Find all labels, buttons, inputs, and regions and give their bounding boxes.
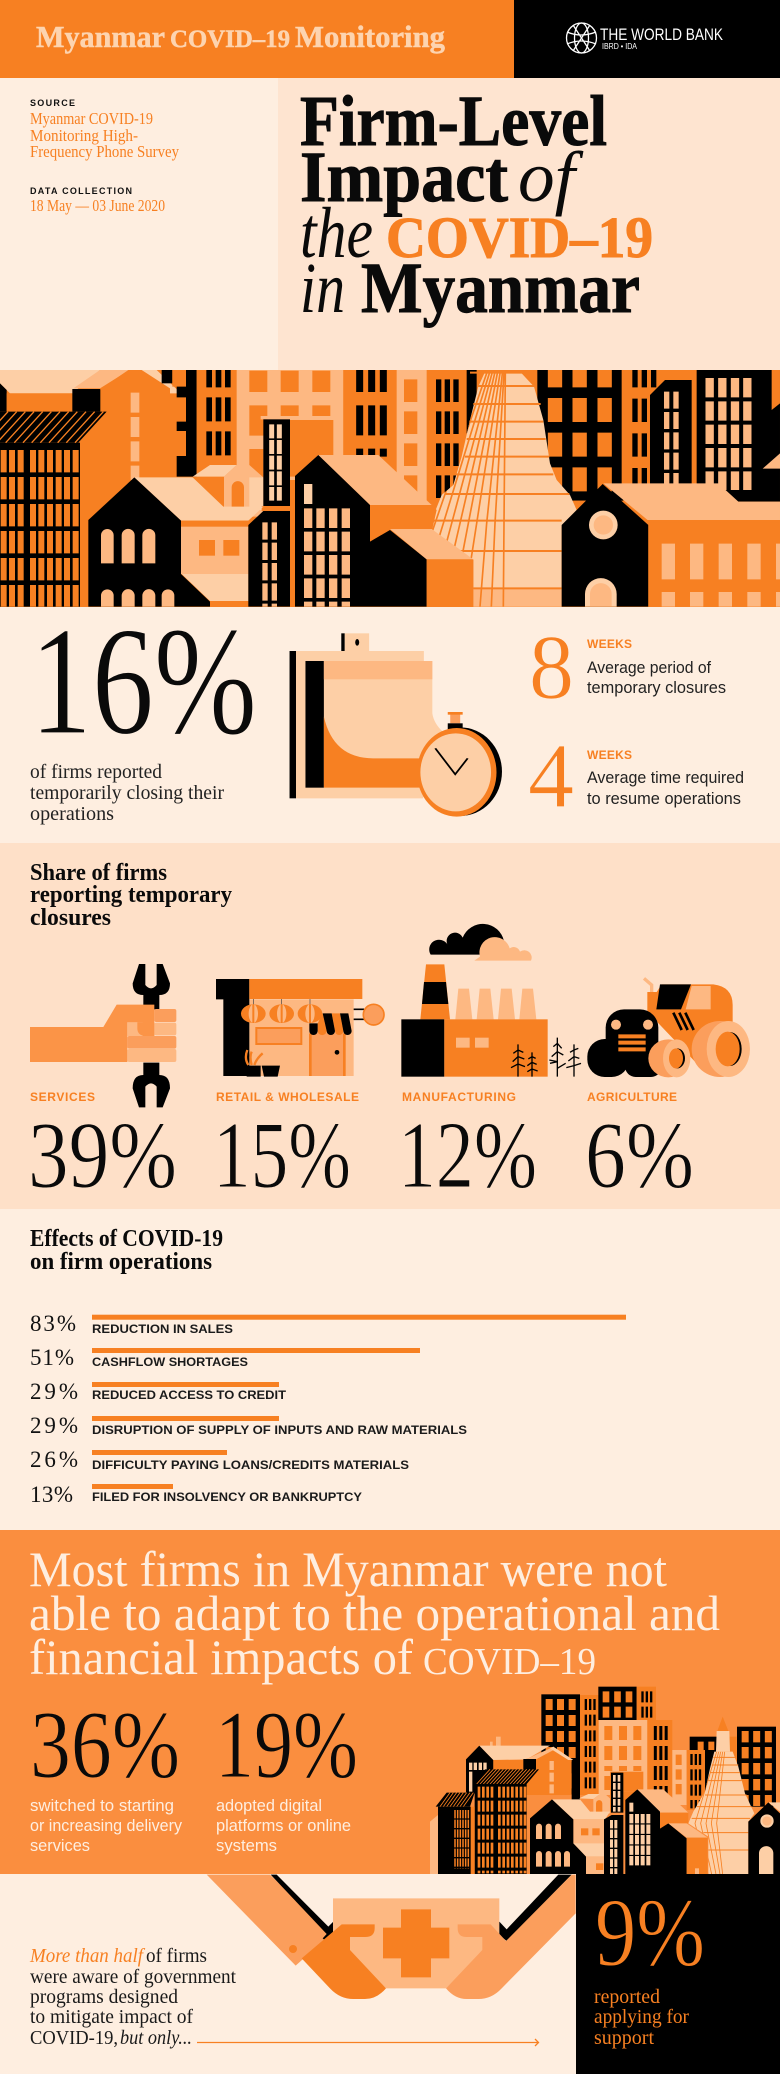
source block: Myanmar COVID-19 [30,109,153,128]
illustration: hands holding aid package [207,1875,576,1999]
source block: SOURCE [30,98,75,108]
caption: reported applying: applying for [594,2006,689,2028]
icon: factory [401,924,581,1077]
data collection block: 18 May — 03 June 2020 [30,196,165,215]
main title [300,81,653,328]
illustration: city skyline [0,362,780,607]
heading: effects [30,1225,223,1275]
stat: 8 weeks [529,616,726,718]
bar chart: effects: 13% [30,1482,73,1507]
bar chart: effects: CASHFLOW SHORTAGES [92,1355,248,1369]
bar chart: effects: REDUCED ACCESS TO CREDIT [92,1388,287,1402]
stat: 8 weeks: temporary closures [587,678,726,697]
stat: 16%: 16% [30,595,257,767]
main title: COVID–19 [386,205,653,270]
stat: 36% delivery [30,1691,182,1855]
text: more than half: to mitigate impact of [30,2006,193,2028]
heading: effects: Effects of COVID-19 [30,1225,223,1252]
World Bank wordmark [600,25,724,51]
bar chart: effects: 51% [30,1345,74,1370]
banner title: Myanmar [36,19,165,54]
sector labels: MANUFACTURING [402,1090,516,1104]
text: more than half: More than half [29,1945,145,1967]
caption: reported applying [594,1986,689,2049]
heading: share of firms: Share of firms [30,859,167,886]
stat: 36% delivery: or increasing delivery [30,1816,182,1835]
text: more than half: COVID-19, [30,2027,118,2049]
bar chart: effects: DIFFICULTY PAYING LOANS/CREDITS MATERIALS [92,1458,409,1472]
caption: firms closing [30,762,224,825]
World Bank wordmark: IBRD • IDA [602,41,637,51]
panel: awareness of government programs [0,1874,576,2074]
source block [30,98,179,161]
stat: 8 weeks: 8 [529,616,574,718]
intro panel [0,78,780,370]
panel: share of firms by sector [0,843,780,1209]
main title: of [518,137,584,217]
stat: 19% digital: platforms or online [216,1816,351,1835]
text: more than half: were aware of government [30,1966,236,1988]
arrow [197,2039,538,2046]
banner title: COVID–19 [170,26,290,53]
sector labels: SERVICES [30,1090,95,1104]
stat: 4 weeks: WEEKS [587,748,632,762]
source block: Frequency Phone Survey [30,142,179,161]
bar chart: effects: 83% [30,1311,76,1336]
icon: hand with wrench [30,964,176,1107]
bar chart: effects: 29% [30,1413,78,1438]
sector percentages: 39% [28,1102,177,1208]
heading: most firms: able to adapt to the operational and [29,1585,720,1641]
stat: 8 weeks: Average period of [587,658,711,677]
caption: reported applying: reported [594,1986,660,2008]
stat: 8 weeks: WEEKS [587,637,632,651]
heading: most firms: financial impacts of [29,1629,413,1685]
bar chart: effects: FILED FOR INSOLVENCY OR BANKRUPTCY [92,1490,362,1504]
text: more than half: but only... [120,2027,192,2049]
stat: 4 weeks: Average time required [587,768,744,787]
bar chart: effects: 26% [30,1447,78,1472]
stat: 4 weeks: 4 [528,725,574,827]
main title: Impact [300,137,508,217]
stat: 36% delivery: switched to starting [30,1796,174,1815]
icon: tractor [587,978,750,1077]
World Bank wordmark: THE WORLD BANK [600,25,724,44]
sector labels: RETAIL & WHOLESALE [216,1090,359,1104]
main title: in [300,248,345,328]
panel: effects on firm operations [0,1209,780,1530]
icon: closed door with stopwatch [290,633,502,817]
text: more than half: programs designed [30,1986,178,2008]
sector labels: AGRICULTURE [587,1090,677,1104]
sector percentages [28,1102,694,1208]
bar chart: effects: REDUCTION IN SALES [92,1322,233,1336]
sector labels [30,1090,677,1104]
caption: firms closing: of firms reported [30,762,162,783]
bar chart: effects: 29% [30,1379,78,1404]
stat: 4 weeks: to resume operations [587,789,741,808]
panel: temporary closures [0,595,780,843]
caption: reported applying: support [594,2027,654,2049]
source block: Monitoring High- [30,126,138,145]
bar chart: effects: DISRUPTION OF SUPPLY OF INPUTS AND RAW MATERIALS [92,1423,467,1437]
heading: effects: on firm operations [30,1248,212,1275]
main title: Firm-Level [300,81,607,161]
main title: Myanmar [361,248,640,328]
heading: share of firms [30,859,233,931]
stat: 9%: 9% [595,1879,705,1987]
caption: firms closing: operations [30,804,114,825]
heading: most firms: Most firms in Myanmar were not [29,1541,667,1597]
stat: 19% digital: adopted digital [216,1796,322,1815]
icon: retail shop [216,979,384,1077]
heading: share of firms: closures [30,904,111,931]
text: more than half: of firms [146,1945,207,1967]
stat: 36% delivery: services [30,1836,90,1855]
heading: most firms: COVID–19 [423,1641,596,1683]
panel: applied for support [576,1874,780,2074]
bar chart: effects [30,1311,626,1507]
panel: firms unable to adapt [0,1530,780,1875]
stat: 19% digital [215,1691,358,1855]
sector percentages: 12% [398,1102,537,1208]
stat: 36% delivery: 36% [30,1691,180,1798]
header banner [0,0,780,78]
heading: share of firms: reporting temporary [30,881,233,908]
caption: firms closing: temporarily closing their [30,783,224,804]
stat: 19% digital: 19% [215,1691,358,1798]
stat: 19% digital: systems [216,1836,277,1855]
main title: the [300,193,373,273]
banner title: Monitoring [295,19,445,54]
sector percentages: 15% [213,1102,351,1208]
sector percentages: 6% [585,1102,694,1208]
data collection block [30,186,165,215]
icon: World Bank globe [566,23,596,53]
text: more than half [29,1945,236,2049]
data collection block: DATA COLLECTION [30,186,132,196]
heading: most firms [29,1541,720,1685]
banner title [36,19,445,54]
stat: 4 weeks [528,725,744,827]
illustration: small city [430,1687,780,1874]
